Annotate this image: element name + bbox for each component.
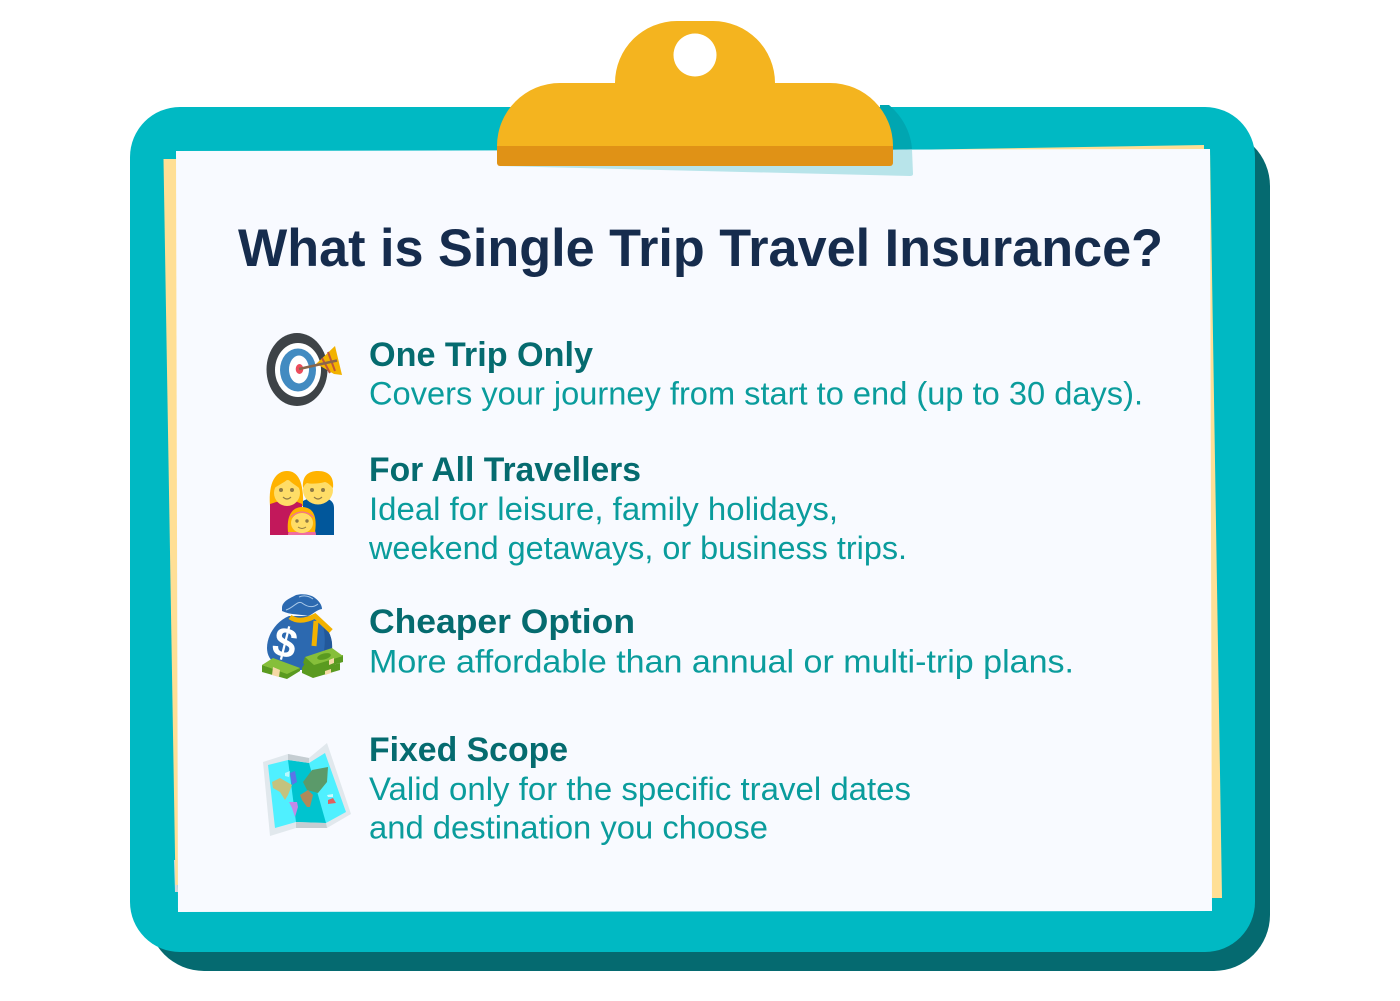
item: one trip only: [266, 333, 1143, 412]
description: More affordable than annual or multi-trip plans.: [369, 644, 1074, 680]
icon: folded world map: [263, 743, 351, 836]
item: for all travellers: [270, 451, 907, 566]
icon: money bag: [262, 594, 343, 679]
heading: Cheaper Option: [369, 603, 635, 641]
description: Ideal for leisure, family holidays,: [369, 491, 838, 527]
title: What is Single Trip Travel Insurance?: [238, 219, 1163, 278]
description: Valid only for the specific travel dates: [369, 771, 911, 807]
clipboard clip: [497, 21, 893, 166]
paper sheets: [164, 145, 1222, 912]
description: Covers your journey from start to end (up to 30 days).: [369, 376, 1143, 412]
description line 2: and destination you choose: [369, 810, 768, 846]
description line 2: weekend getaways, or business trips.: [368, 530, 907, 566]
clip shadow: [497, 105, 913, 176]
icon: money bag: $: [268, 617, 302, 668]
heading: Fixed Scope: [369, 731, 568, 769]
clipboard board: [130, 107, 1270, 971]
item: fixed scope: [263, 731, 911, 846]
heading: For All Travellers: [369, 451, 641, 489]
item: cheaper option: [262, 594, 1074, 680]
heading: One Trip Only: [369, 336, 593, 374]
icon: family: [270, 471, 334, 535]
icon: target with arrow: [266, 333, 342, 406]
